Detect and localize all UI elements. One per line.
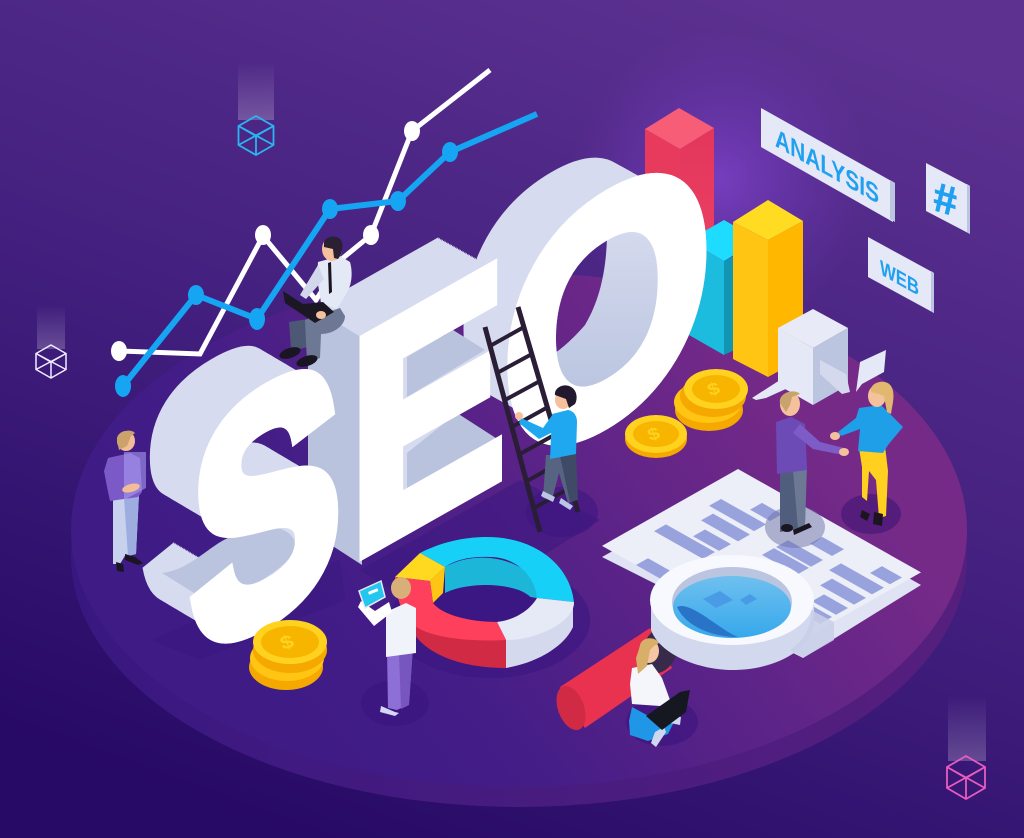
label: WEB: WEB [880,255,919,300]
person: seated woman with laptop [626,638,698,747]
letter O [464,85,707,536]
giant 3D SEO letters: O [507,85,707,536]
person: man in suit on letters [278,237,352,369]
single coin [625,415,687,458]
single coin: $ [645,424,663,445]
letter E [308,194,506,630]
cube icon: white with beam [36,305,66,378]
cube icon: cyan with beam [238,62,274,155]
donut: outer walls [408,620,506,668]
bar: cyan [689,220,759,355]
bar: red [645,108,714,300]
person: left with holographic screen [104,431,146,572]
donut: white segment [497,598,574,640]
donut chart [390,537,590,678]
person: man in purple [776,391,849,535]
donut: inner wall and hole [445,558,537,598]
label: hash [926,163,970,234]
coin stack: centre [674,369,748,431]
lower document sheet [602,481,921,658]
donut: cyan segment [420,537,574,602]
donut: yellow segment [395,553,445,581]
upper document sheet with bars [602,469,921,649]
bar: yellow [733,200,803,377]
label: WEB [868,237,934,313]
coin stack: front left: $ [277,631,297,654]
circular platform [71,273,967,807]
giant 3D SEO letters: E [348,194,506,630]
shadow: ladder man [526,487,598,537]
white line chart [111,70,490,361]
donut: red segment [395,577,506,640]
cube icon: pink with beam [947,695,986,799]
shadow: woman [841,494,901,534]
letter S [142,282,341,734]
coin stack: centre: $ [705,379,723,400]
person: woman in blue [830,382,903,526]
label: hash: # [934,173,957,227]
person: on ladder [515,385,578,510]
label: ANALYSIS: ANALYSIS [775,123,879,210]
giant 3D SEO letters: S [190,282,341,734]
magnifier handle [551,622,684,734]
giant 3D SEO letters: O [507,85,707,536]
giant 3D SEO letters: E [348,194,506,630]
person: tablet user [358,577,429,726]
white box with speech bubbles [752,309,886,405]
blue line chart [115,114,537,397]
coin stack: front left [249,620,327,690]
ladder [485,307,578,532]
shadow: man on documents [765,506,825,548]
magnifying glass [650,555,834,670]
giant 3D SEO letters: S [190,282,341,734]
ground shadows under letters [150,480,600,660]
